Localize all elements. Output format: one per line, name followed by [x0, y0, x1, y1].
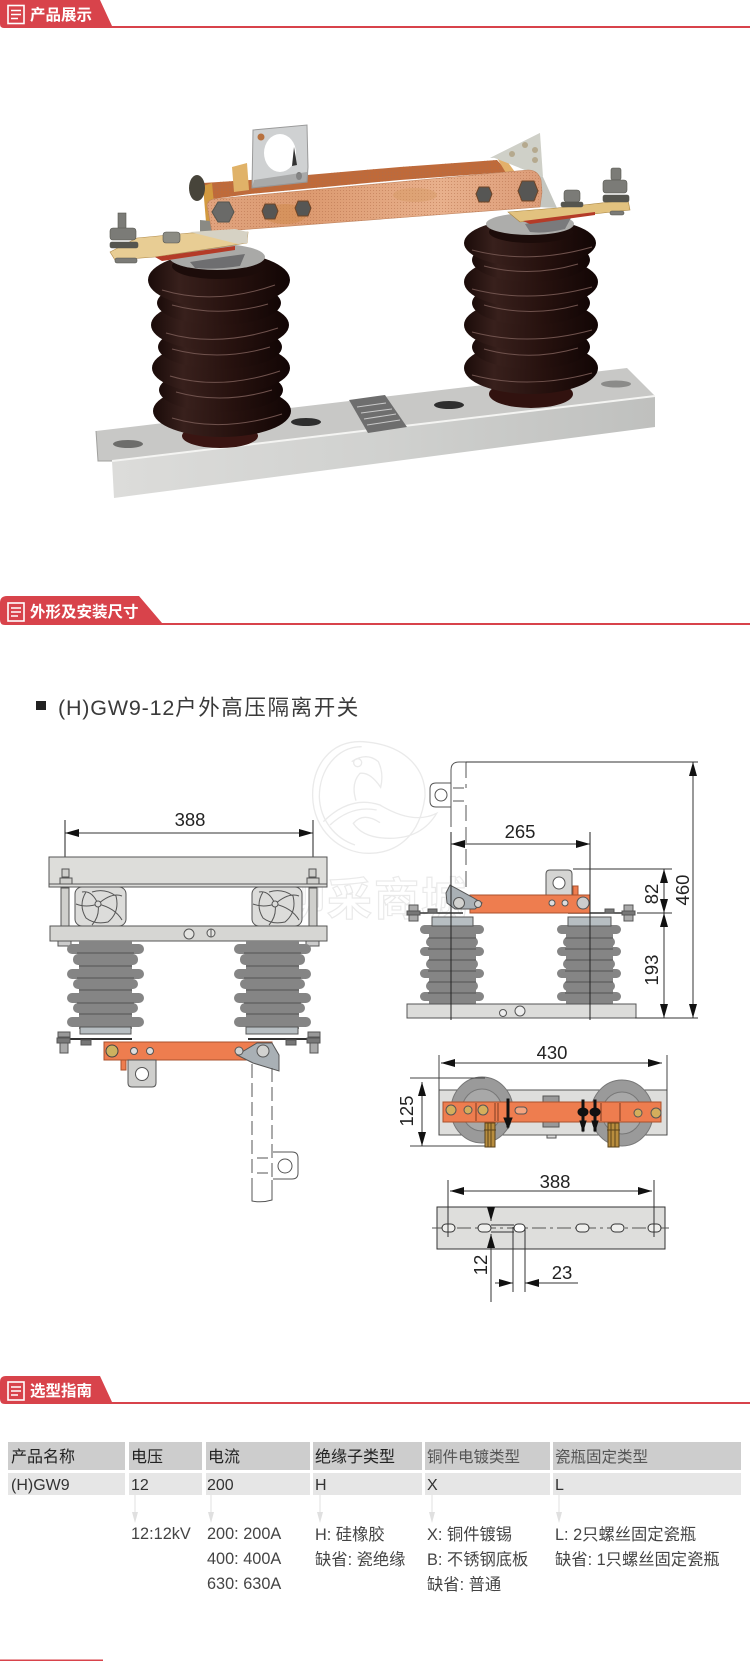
dimension 430 [439, 1042, 667, 1135]
icon: document [8, 1382, 24, 1400]
dimension 125: 125 [396, 1096, 417, 1126]
model code row [8, 1473, 741, 1495]
option descriptions: 200: 200A [207, 1525, 281, 1543]
header: selection guide [0, 1376, 750, 1404]
option descriptions: B: 不锈钢底板 [427, 1551, 528, 1569]
model code row: 200 [207, 1477, 234, 1494]
watermark [280, 742, 468, 925]
insulator right [234, 941, 311, 1029]
option descriptions: 缺省: 瓷绝缘 [315, 1551, 405, 1569]
nameplate [349, 395, 407, 433]
drawing: top view [396, 1042, 667, 1147]
insulator left [420, 925, 484, 1004]
option descriptions: 缺省: 1只螺丝固定瓷瓶 [555, 1551, 720, 1569]
table header row: 产品名称 [11, 1448, 75, 1466]
model code row: 12 [131, 1477, 149, 1494]
option descriptions: 400: 400A [207, 1550, 281, 1568]
silver triangular plate [490, 133, 557, 208]
table header row: 绝缘子类型 [315, 1448, 395, 1466]
model code row: X [427, 1477, 438, 1494]
icon: document [8, 6, 24, 24]
left terminal bar [110, 229, 248, 261]
model code row: L [555, 1477, 564, 1494]
dimension 12 [470, 1207, 491, 1302]
pointer arrows [132, 1495, 562, 1523]
slots [442, 1224, 661, 1232]
option descriptions: L: 2只螺丝固定瓷瓶 [555, 1526, 696, 1544]
fan cover right [252, 887, 302, 926]
dimension 430: 430 [537, 1042, 567, 1063]
option descriptions: 12:12kV [131, 1525, 191, 1543]
dimension 388: 388 [175, 809, 205, 830]
watermark emblem [313, 742, 437, 853]
dimension 388: 388 [540, 1171, 570, 1192]
dimensions 82, 193, 460: 460 [672, 875, 693, 905]
header: product display: 产品展示 [30, 6, 92, 24]
middle plate [50, 926, 327, 946]
insulator discs [451, 1077, 653, 1146]
caps and terminals [407, 905, 635, 926]
header: selection guide: 选型指南 [30, 1382, 92, 1400]
table header row: 电流 [208, 1448, 240, 1466]
dimension 23 [495, 1227, 578, 1292]
dimensions 82, 193, 460: 82 [641, 884, 662, 904]
grey pivot arm [446, 885, 482, 909]
header: dimensions: 外形及安装尺寸 [30, 602, 139, 621]
header: dimensions [0, 596, 750, 625]
mounting plate [439, 1090, 667, 1138]
lower hook plate [128, 1060, 156, 1087]
table header row: 瓷瓶固定类型 [555, 1448, 648, 1466]
right insulator metal cap [486, 213, 574, 243]
table header row: 铜件电镀类型 [427, 1448, 520, 1466]
drawing: side view [407, 762, 698, 1020]
model code row: H [315, 1477, 327, 1494]
dimension 12: 12 [470, 1255, 491, 1275]
subtitle: (H)GW9-12户外高压隔离开关 [58, 696, 360, 720]
insulator left [67, 941, 144, 1029]
option descriptions: H: 硅橡胶 [315, 1526, 385, 1544]
open position blade dashed [252, 1064, 298, 1202]
right terminal bar [508, 200, 630, 224]
orange blade [104, 1042, 272, 1070]
icon: document [8, 603, 24, 621]
open position blade [430, 762, 466, 890]
table header row [8, 1442, 741, 1470]
option descriptions [131, 1525, 720, 1594]
header: product display [0, 0, 750, 28]
fan cover left [75, 887, 126, 926]
dimensions 82, 193, 460 [466, 762, 698, 1018]
right porcelain insulator [464, 219, 598, 408]
option descriptions: X: 铜件镀锡 [427, 1526, 512, 1544]
copper blade back channel [189, 157, 515, 225]
option descriptions: 630: 630A [207, 1575, 281, 1593]
drawing: front view [49, 809, 327, 1202]
centre reference lines [451, 832, 590, 1020]
dimension 265: 265 [505, 821, 535, 842]
silver hook plate [252, 125, 308, 188]
model code row: (H)GW9 [11, 1477, 70, 1494]
steel base channel [96, 368, 655, 498]
dimension 125 [396, 1078, 485, 1146]
insulator caps and terminals [57, 1027, 320, 1053]
dimension 388 [448, 1171, 654, 1237]
dimensions 82, 193, 460: 193 [641, 955, 662, 985]
dimension 388 [65, 809, 313, 883]
terminal stand-off behind blade [200, 220, 222, 237]
table header row: 电压 [131, 1448, 163, 1466]
dimension 265 [451, 821, 590, 844]
black bolts [504, 1099, 600, 1131]
drawing: base plate hole layout [432, 1171, 669, 1302]
product photo: isolating switch [96, 125, 655, 498]
next section edge [0, 1660, 103, 1661]
centre line [432, 1227, 669, 1229]
option descriptions: 缺省: 普通 [427, 1576, 501, 1594]
watermark: 聊采商城 [280, 874, 468, 925]
selection table [8, 1442, 741, 1594]
terminal bolts [110, 168, 629, 263]
orange blade [470, 895, 590, 913]
hook plate [546, 870, 578, 895]
insulator right [557, 925, 621, 1004]
left porcelain insulator [148, 252, 291, 448]
grey pivot arm [235, 1043, 279, 1071]
bar bolts [212, 181, 538, 222]
copper blade front bar [207, 170, 542, 232]
orange blade [443, 1102, 661, 1122]
top plate [49, 857, 327, 887]
base plate [407, 1004, 636, 1018]
brass feet [484, 1123, 620, 1147]
bolts and posts [60, 869, 319, 926]
left insulator metal cap [169, 244, 265, 279]
plate [437, 1207, 665, 1249]
dimension 23: 23 [552, 1262, 572, 1283]
